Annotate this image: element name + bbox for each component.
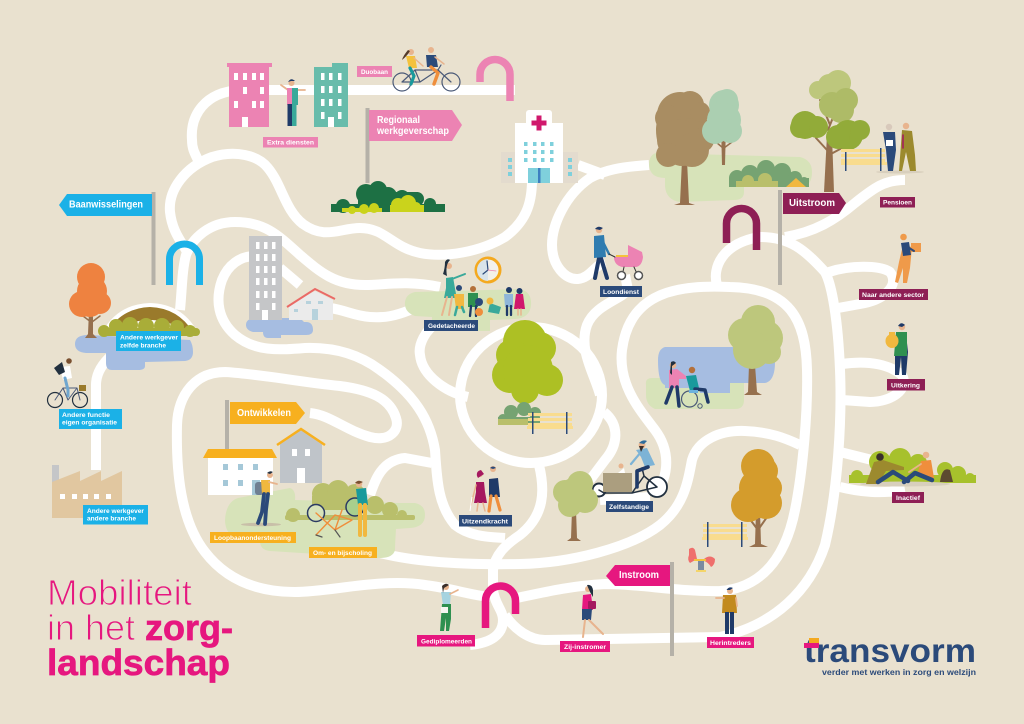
title bbox=[47, 572, 233, 683]
label: Andere werkgever andere branche: andere branche bbox=[87, 516, 136, 522]
label: Loopbaanondersteuning: Loopbaanondersteuning bbox=[214, 535, 291, 542]
arch: wine outflow gate bbox=[726, 209, 756, 250]
road network bbox=[96, 90, 905, 645]
tree: golden tree bbox=[731, 449, 782, 547]
scene: lake and bridge with orange tree bbox=[69, 263, 200, 370]
label: Uitzendkracht: Uitzendkracht bbox=[462, 518, 509, 526]
figure: cyclist with basket bbox=[48, 358, 88, 408]
arch: regional pink gate bbox=[480, 60, 510, 101]
sign: Baanwisselingen bbox=[59, 192, 156, 285]
title: landschap bbox=[47, 642, 230, 683]
label: Uitkering bbox=[887, 379, 925, 390]
label: Andere werkgever zelfde branche: zelfde branche bbox=[120, 342, 166, 350]
figure: side-entrant woman walking bbox=[582, 585, 603, 637]
scene: pink office building bbox=[227, 63, 272, 127]
sign: Ontwikkelen: Ontwikkelen bbox=[237, 408, 291, 419]
label: Zelfstandige bbox=[606, 501, 653, 512]
sign: Baanwisselingen: Baanwisselingen bbox=[69, 200, 143, 210]
scene: children playing with teacher bbox=[405, 258, 531, 331]
tree: small green tree bbox=[553, 471, 598, 541]
scene: development campus bbox=[203, 429, 425, 558]
scene: green office building bbox=[314, 63, 348, 127]
figure: bicycle repair bbox=[308, 481, 368, 537]
sign: Regionaal werkgeverschap: Regionaal bbox=[377, 115, 420, 126]
label: Pensioen bbox=[880, 197, 915, 208]
icon: park bench near pensioners bbox=[841, 148, 887, 171]
label: Gedetacheerde: Gedetacheerde bbox=[428, 323, 475, 330]
tree: brown bbox=[655, 91, 714, 205]
arch: blue job-change gate bbox=[170, 244, 200, 285]
scene: factory bbox=[52, 465, 122, 518]
label: Naar andere sector: Naar andere sector bbox=[862, 292, 924, 299]
scene: grey tower with lake and house bbox=[246, 236, 335, 338]
figure: tandem bicycle with two riders bbox=[393, 47, 460, 91]
tree: olive green bbox=[728, 305, 783, 395]
label: Om- en bijscholing: Om- en bijscholing bbox=[313, 550, 372, 557]
label: Gediplomeerden: Gediplomeerden bbox=[421, 638, 472, 646]
tree: sage green bbox=[702, 89, 742, 165]
tree: central lime tree bbox=[492, 320, 563, 413]
label: Zelfstandige: Zelfstandige bbox=[609, 504, 649, 511]
figure: children bbox=[454, 285, 525, 316]
figure: graduate with paper bbox=[440, 584, 458, 631]
sign: Uitstroom: Uitstroom bbox=[789, 198, 835, 209]
figure: woman pushing wheelchair bbox=[666, 361, 686, 406]
label: Zij-instromer: Zij-instromer bbox=[564, 644, 606, 651]
label: Pensioen: Pensioen bbox=[883, 200, 912, 206]
label: Loondienst bbox=[600, 286, 642, 297]
label: Duobaan bbox=[357, 66, 392, 77]
label: Uitkering: Uitkering bbox=[891, 382, 920, 390]
icon: rocking horse bbox=[688, 548, 715, 572]
tree: orange bbox=[69, 263, 111, 338]
label: Andere werkgever zelfde branche bbox=[116, 331, 181, 351]
bush: behind cyclist repair bbox=[285, 480, 415, 522]
label: Inactief: Inactief bbox=[896, 495, 921, 502]
label: Andere functie eigen organisatie bbox=[59, 409, 122, 429]
scene: people sitting at bushes bbox=[849, 448, 976, 486]
figure: man with pram bbox=[594, 227, 643, 280]
title: in het bbox=[47, 607, 135, 648]
tree: large olive tree bbox=[790, 70, 870, 192]
sign: Instroom bbox=[606, 562, 674, 656]
label: Duobaan: Duobaan bbox=[361, 69, 388, 76]
house: red roof bbox=[287, 289, 335, 320]
bush: under central tree bbox=[498, 402, 541, 425]
label: Andere werkgever andere branche: Andere werkgever bbox=[87, 508, 144, 515]
sign: Instroom: Instroom bbox=[619, 570, 659, 581]
label: Zij-instromer bbox=[560, 641, 610, 652]
label: Andere werkgever zelfde branche: Andere werkgever bbox=[120, 334, 178, 342]
label: Loopbaanondersteuning bbox=[210, 532, 296, 543]
label: Loondienst: Loondienst bbox=[603, 289, 640, 296]
icon: bench under central tree bbox=[527, 412, 573, 434]
label: Extra diensten: Extra diensten bbox=[267, 140, 314, 146]
figure: man in wheelchair bbox=[682, 367, 708, 408]
scene: dark green bushes bbox=[331, 181, 445, 214]
bush: green and orange bbox=[729, 160, 809, 187]
sign: Uitstroom bbox=[778, 190, 846, 285]
icon: wall clock bbox=[476, 258, 500, 282]
label: Naar andere sector bbox=[859, 289, 928, 300]
figure: couple with white cane bbox=[470, 466, 500, 511]
logo: transvorm: verder met werken in zorg en welzijn bbox=[822, 667, 976, 677]
building: white with orange roof bbox=[203, 449, 277, 495]
label: Andere functie eigen organisatie: Andere functie bbox=[62, 412, 110, 419]
figure: returning worker bbox=[716, 587, 737, 634]
sign: Ontwikkelen bbox=[225, 400, 305, 450]
icon: park bench near golden tree bbox=[702, 522, 748, 547]
sign: Regionaal werkgeverschap bbox=[366, 108, 462, 183]
label: Gedetacheerde bbox=[424, 320, 478, 331]
bridge: arched over bushes bbox=[98, 303, 200, 337]
figure: man with money bag bbox=[886, 323, 908, 375]
arch: magenta inflow gate bbox=[486, 586, 516, 628]
sign: Regionaal werkgeverschap: werkgeverschap bbox=[376, 126, 449, 137]
label: Om- en bijscholing bbox=[309, 547, 377, 558]
figure: teacher bbox=[442, 259, 465, 315]
scene: lake with wheelchair users bbox=[646, 305, 783, 409]
title: zorg- bbox=[145, 607, 233, 648]
icon: logo plus mark bbox=[804, 638, 819, 648]
figure: two elderly people bbox=[876, 123, 924, 174]
figure: cargo bike with child bbox=[592, 440, 667, 497]
label: Herintreders: Herintreders bbox=[710, 640, 751, 647]
label: Andere functie eigen organisatie: eigen organisatie bbox=[62, 420, 117, 426]
label: Extra diensten bbox=[263, 137, 318, 148]
logo: transvorm: transvorm bbox=[804, 632, 976, 669]
figure: person with backpack bbox=[241, 471, 281, 526]
scene: park with trees and bushes bbox=[649, 89, 812, 205]
label: Inactief bbox=[892, 492, 924, 503]
building: grey house bbox=[277, 429, 325, 483]
label: Gediplomeerden bbox=[417, 635, 475, 646]
title: Mobiliteit bbox=[47, 572, 192, 613]
label: Herintreders bbox=[707, 637, 754, 648]
label: Andere werkgever andere branche bbox=[83, 505, 148, 524]
figure: care worker with name tag bbox=[281, 79, 305, 126]
figure: worker carrying box bbox=[895, 234, 921, 283]
label: Uitzendkracht bbox=[459, 515, 512, 526]
scene: hospital bbox=[501, 110, 578, 183]
